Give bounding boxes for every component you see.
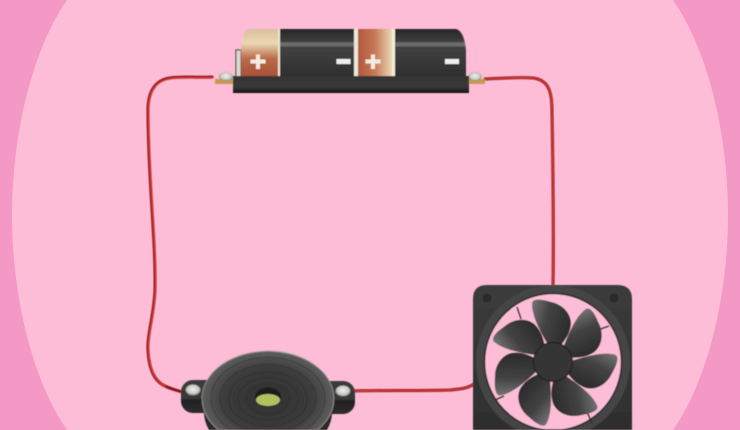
buzzer membrane [256,394,280,406]
fan [473,285,632,430]
terminal left [215,72,235,84]
right ear [316,381,355,414]
left screw [186,384,200,396]
concentric grooves [211,357,325,430]
terminal right [467,72,485,84]
wires [148,77,553,392]
right screw [336,386,350,396]
minus sign [445,59,459,64]
buzzer [181,351,355,430]
spring clip [236,50,241,77]
battery 2 [354,29,466,77]
plus sign [366,54,380,69]
fan blades [488,300,618,427]
buzzer side [204,366,332,430]
battery holder [215,29,485,93]
buzzer rim [202,351,334,430]
minus sign [336,59,350,64]
fan ring [476,285,630,430]
struts [495,307,609,423]
buzzer top [202,351,334,430]
fan hub [534,342,572,382]
left ear [181,380,221,413]
battery 1 [241,29,355,77]
fan housing [473,285,632,430]
fan opening [484,294,621,430]
circuit artwork [148,29,632,430]
buzzer hole [255,388,281,406]
plus sign [250,54,266,69]
mounting holes [482,294,618,302]
holder base [233,76,469,93]
